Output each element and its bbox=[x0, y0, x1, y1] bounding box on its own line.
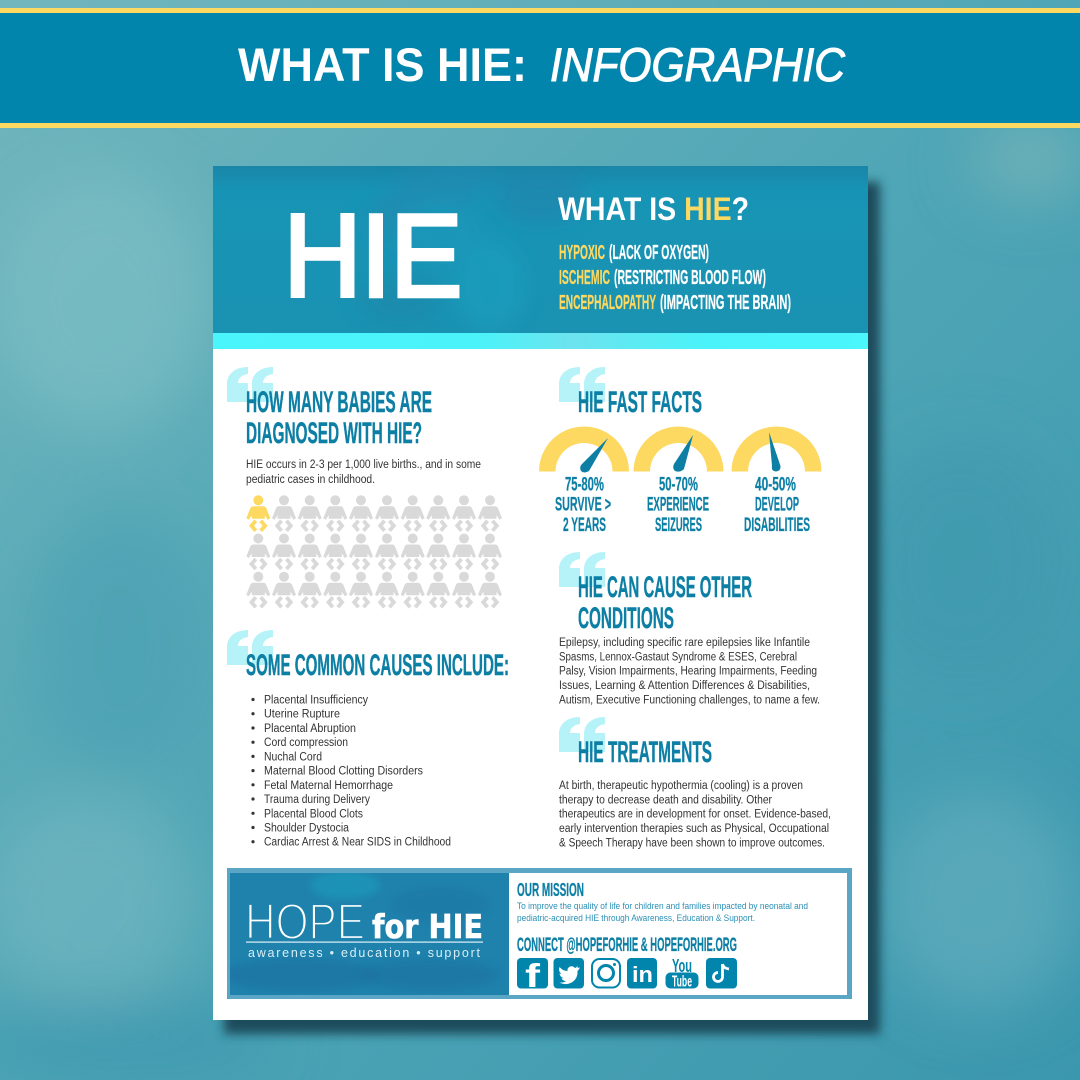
text block bbox=[246, 459, 481, 486]
bullet list: Fetal Maternal Hemorrhage bbox=[264, 780, 393, 792]
icon: instagram bbox=[592, 959, 620, 988]
chart: baby pictogram, 1 in 30 highlighted bbox=[246, 495, 502, 607]
icon: youtube: Tube bbox=[672, 974, 692, 990]
gauge: disabilities: DEVELOP bbox=[755, 494, 799, 516]
heading: HOW MANY BABIES ARE bbox=[246, 386, 432, 419]
document page bbox=[213, 134, 868, 1020]
banner title bbox=[238, 38, 846, 91]
heading bbox=[578, 571, 752, 635]
icon: linkedin bbox=[627, 958, 657, 988]
icon: facebook: f bbox=[525, 957, 541, 994]
text block: therapeutics are in development for onset. Evidence-based, bbox=[559, 809, 831, 821]
acronym definitions: ENCEPHALOPATHY bbox=[559, 291, 656, 314]
gauge: survive: 75-80% bbox=[565, 474, 604, 496]
bullet list: Cord compression bbox=[264, 737, 348, 749]
panel: other conditions bbox=[559, 552, 820, 706]
icon: youtube bbox=[666, 956, 698, 990]
big HIE: HIE bbox=[284, 190, 462, 321]
text block: HIE occurs in 2-3 per 1,000 live births., and in some bbox=[246, 459, 481, 471]
icon: youtube: You bbox=[672, 956, 692, 976]
heading: CONDITIONS bbox=[578, 602, 674, 635]
text block: & Speech Therapy have been shown to improve outcomes. bbox=[559, 837, 825, 849]
acronym definitions: ISCHEMIC bbox=[559, 266, 610, 289]
panel: common causes bbox=[227, 630, 509, 849]
heading: SOME COMMON CAUSES INCLUDE: bbox=[246, 649, 509, 682]
text block: Autism, Executive Functioning challenges, to name a few. bbox=[559, 694, 820, 706]
banner title: WHAT IS HIE: bbox=[238, 38, 527, 91]
text block: At birth, therapeutic hypothermia (cooling) is a proven bbox=[559, 780, 803, 792]
logo panel: awareness • education • support bbox=[248, 946, 481, 960]
icon: tiktok bbox=[706, 958, 737, 988]
panel: how many babies bbox=[227, 367, 502, 607]
gauge: seizures: 50-70% bbox=[659, 474, 698, 496]
text block: Spasms, Lennox-Gastaut Syndrome & ESES, Cerebral bbox=[559, 651, 797, 663]
heading: DIAGNOSED WITH HIE? bbox=[246, 417, 422, 450]
text block: therapy to decrease death and disability. Other bbox=[559, 794, 772, 806]
acronym definitions bbox=[559, 241, 791, 314]
icon: twitter bbox=[554, 958, 584, 988]
gauge: seizures bbox=[634, 426, 724, 536]
gauge: seizures: EXPERIENCE bbox=[647, 494, 709, 516]
text block: Epilepsy, including specific rare epilepsies like Infantile bbox=[559, 637, 810, 649]
icon: facebook bbox=[517, 957, 548, 994]
acronym definitions: HYPOXIC bbox=[559, 241, 605, 264]
bullet list: Placental Abruption bbox=[264, 723, 356, 735]
icon: quote mark bbox=[227, 367, 273, 402]
bullet list: Trauma during Delivery bbox=[264, 794, 370, 806]
logo panel: HOPE bbox=[245, 893, 365, 950]
gauge: disabilities: DISABILITIES bbox=[744, 515, 810, 536]
header cyan strip bbox=[213, 333, 868, 349]
panel: other conditions: HIE CAN CAUSE OTHER bbox=[578, 571, 752, 604]
logo panel bbox=[220, 871, 509, 995]
panel: header bbox=[213, 166, 868, 349]
gauge: seizures: SEIZURES bbox=[655, 515, 702, 536]
heading: HIE FAST FACTS bbox=[578, 386, 702, 419]
bullet list: Placental Blood Clots bbox=[264, 808, 363, 820]
bullet list: Nuchal Cord bbox=[264, 751, 322, 763]
document shadow bbox=[224, 182, 880, 1034]
gauge: disabilities bbox=[732, 426, 822, 536]
text block bbox=[559, 637, 820, 706]
heading: HIE TREATMENTS bbox=[578, 736, 712, 769]
acronym definitions: (LACK OF OXYGEN) bbox=[609, 241, 709, 264]
panel: fast facts bbox=[539, 367, 822, 536]
heading bbox=[246, 386, 432, 450]
mission panel bbox=[509, 873, 847, 995]
text block: early intervention therapies such as Physical, Occupational bbox=[559, 823, 829, 835]
panel: footer bbox=[220, 868, 852, 999]
gauge: survive: SURVIVE > bbox=[555, 494, 611, 516]
text block: pediatric cases in childhood. bbox=[246, 474, 375, 486]
gauge: disabilities: 40-50% bbox=[755, 474, 796, 496]
acronym definitions: (IMPACTING THE BRAIN) bbox=[660, 291, 791, 314]
mission panel: To improve the quality of life for children and families impacted by neonatal and bbox=[517, 901, 808, 912]
mission panel: pediatric-acquired HIE through Awareness, Education & Support. bbox=[517, 913, 755, 924]
gauge: survive bbox=[539, 426, 629, 536]
banner title: INFOGRAPHIC bbox=[550, 38, 846, 91]
icon: quote mark bbox=[227, 630, 273, 665]
panel: treatments bbox=[559, 717, 831, 849]
what is HIE heading: WHAT IS HIE? bbox=[558, 191, 749, 227]
bullet list: Placental Insufficiency bbox=[264, 694, 368, 706]
bullet list: Maternal Blood Clotting Disorders bbox=[264, 766, 423, 778]
text block: Palsy, Vision Impairments, Hearing Impairments, Feeding bbox=[559, 666, 817, 678]
text block: Issues, Learning & Attention Differences & Disabilities, bbox=[559, 680, 810, 692]
bullet list: Shoulder Dystocia bbox=[264, 822, 350, 834]
mission panel: CONNECT @HOPEFORHIE & HOPEFORHIE.ORG bbox=[517, 935, 737, 956]
icon: quote mark bbox=[559, 367, 605, 402]
bullet list bbox=[251, 694, 451, 849]
logo panel: for HIE bbox=[372, 907, 483, 946]
text block bbox=[559, 780, 831, 849]
gauge: survive: 2 YEARS bbox=[563, 515, 606, 536]
icon: quote mark bbox=[559, 717, 605, 752]
icon: linkedin: in bbox=[632, 962, 653, 987]
mission panel: OUR MISSION bbox=[517, 880, 584, 900]
bullet list: Uterine Rupture bbox=[264, 709, 340, 721]
top banner bbox=[0, 8, 1080, 128]
bullet list: Cardiac Arrest & Near SIDS in Childhood bbox=[264, 837, 451, 849]
acronym definitions: (RESTRICTING BLOOD FLOW) bbox=[614, 266, 766, 289]
icon: quote mark bbox=[559, 552, 605, 587]
